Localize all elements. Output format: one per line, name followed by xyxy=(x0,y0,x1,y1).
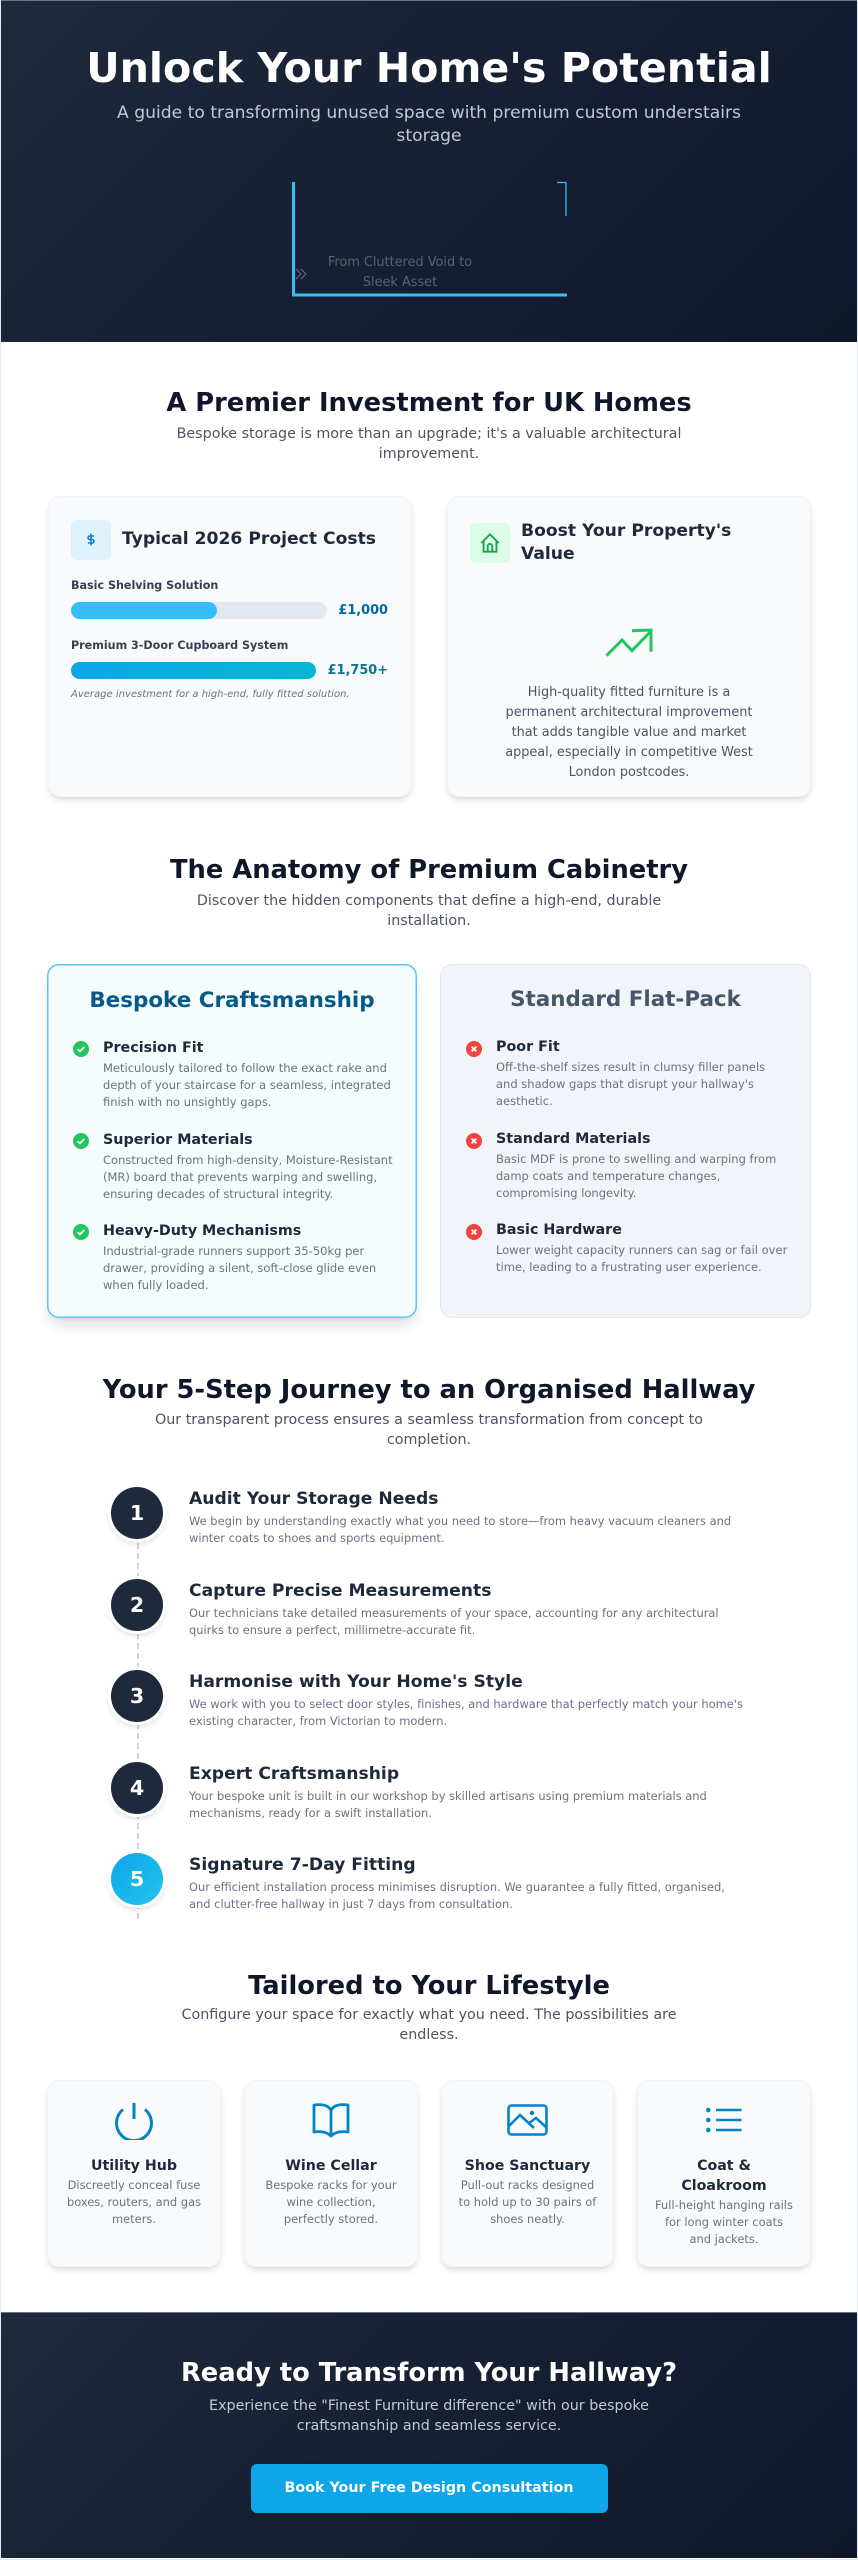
panel title: Bespoke Craftsmanship xyxy=(89,988,375,1013)
feature text: drawer, providing a silent, soft-close glide even xyxy=(103,1261,376,1275)
panel: coat and cloakroom xyxy=(637,2080,811,2267)
card text: Full-height hanging rails xyxy=(655,2198,793,2212)
step text: Our technicians take detailed measurements of your space, accounting for any architectural xyxy=(189,1606,719,1620)
drawback text: damp coats and temperature changes, xyxy=(496,1169,720,1183)
step text: and clutter-free hallway in just 7 days from consultation. xyxy=(189,1897,513,1911)
section heading: journey xyxy=(102,1375,755,1448)
step number xyxy=(111,1762,163,1814)
feature text xyxy=(103,1061,391,1109)
step text: We work with you to select door styles, finishes, and hardware that perfectly match your home's xyxy=(189,1697,743,1711)
feature text: ensuring decades of structural integrity. xyxy=(103,1187,333,1201)
drawback text: Lower weight capacity runners can sag or fail over xyxy=(496,1243,787,1257)
card text: Bespoke racks for your xyxy=(265,2178,397,2192)
value text: appeal, especially in competitive West xyxy=(505,745,753,760)
drawback: basic hardware xyxy=(466,1222,788,1274)
feature text: (MR) board that prevents warping and swelling, xyxy=(103,1170,377,1184)
card title: Coat & xyxy=(697,2158,751,2174)
icon: check xyxy=(73,1041,89,1057)
feature title: Precision Fit xyxy=(103,1040,204,1056)
panel: project costs xyxy=(48,496,412,797)
section heading: anatomy xyxy=(170,855,688,929)
feature text: finish with no unsightly gaps. xyxy=(103,1095,272,1109)
step number xyxy=(111,1670,163,1722)
card text: meters. xyxy=(112,2212,156,2226)
icon: dollar xyxy=(71,520,111,560)
feature title: Superior Materials xyxy=(103,1132,253,1148)
icon: trending up xyxy=(606,628,652,657)
step 5 xyxy=(0,1853,858,1913)
drawback text xyxy=(496,1060,765,1108)
title: Unlock Your Home's Potential xyxy=(86,44,772,92)
card title: Shoe Sanctuary xyxy=(465,2158,590,2174)
footer heading: Ready to Transform Your Hallway? xyxy=(181,2358,677,2388)
drawback text: and shadow gaps that disrupt your hallway's xyxy=(496,1077,754,1091)
heading: The Anatomy of Premium Cabinetry xyxy=(170,855,688,885)
step text xyxy=(189,1697,743,1728)
icon: check xyxy=(73,1224,89,1240)
drawback text: Basic MDF is prone to swelling and warping from xyxy=(496,1152,776,1166)
step number: 5 xyxy=(130,1867,144,1891)
icon: cross xyxy=(466,1133,482,1149)
icon: cross xyxy=(466,1041,482,1057)
drawback text: time, leading to a frustrating user experience. xyxy=(496,1260,762,1274)
icon: house xyxy=(470,523,510,563)
intro text xyxy=(177,426,681,462)
button: Book Your Free Design Consultation xyxy=(284,2480,574,2496)
intro text xyxy=(0,2005,858,2045)
bar label: Premium 3-Door Cupboard System xyxy=(71,639,288,652)
icon: open book xyxy=(312,2102,350,2138)
step number xyxy=(111,1487,163,1539)
panel title: Standard Flat-Pack xyxy=(510,987,741,1012)
panel: bespoke craftsmanship xyxy=(47,964,417,1318)
step 1 xyxy=(108,1487,731,1546)
panel: wine cellar xyxy=(244,2080,418,2267)
intro text xyxy=(155,1412,703,1448)
drawback text xyxy=(496,1152,776,1200)
value text: that adds tangible value and market xyxy=(512,725,746,740)
feature: superior materials xyxy=(73,1132,393,1201)
step title: Audit Your Storage Needs xyxy=(189,1489,439,1509)
button xyxy=(250,2464,608,2513)
step text: existing character, from Victorian to modern. xyxy=(189,1714,447,1728)
illustration caption xyxy=(328,255,472,290)
bar: basic shelving xyxy=(71,579,388,619)
bar value: £1,000 xyxy=(338,603,388,618)
drawback title: Standard Materials xyxy=(496,1131,651,1147)
value text: London postcodes. xyxy=(569,765,689,780)
intro text xyxy=(197,893,661,929)
intro text: installation. xyxy=(387,913,471,929)
drawback text: Off-the-shelf sizes result in clumsy filler panels xyxy=(496,1060,765,1074)
step text: mechanisms, ready for a swift installation. xyxy=(189,1806,432,1820)
step text: quirks to ensure a perfect, millimetre-accurate fit. xyxy=(189,1623,475,1637)
feature text: Constructed from high-density, Moisture-Resistant xyxy=(103,1153,393,1167)
step text xyxy=(189,1514,731,1545)
feature text: depth of your staircase for a seamless, integrated xyxy=(103,1078,391,1092)
step title: Capture Precise Measurements xyxy=(189,1581,491,1601)
card text: for long winter coats xyxy=(665,2215,783,2229)
intro text: Configure your space for exactly what you need. The possibilities are xyxy=(181,2007,677,2023)
step text: Your bespoke unit is built in our workshop by skilled artisans using premium materials and xyxy=(189,1789,707,1803)
icon: cross xyxy=(466,1224,482,1240)
card text: shoes neatly. xyxy=(490,2212,565,2226)
footer call to action xyxy=(1,2312,857,2558)
icon: picture xyxy=(507,2104,548,2136)
value text: permanent architectural improvement xyxy=(506,705,752,720)
icon: list xyxy=(705,2105,743,2135)
card text: to hold up to 30 pairs of xyxy=(459,2195,596,2209)
panel: standard flat-pack xyxy=(440,964,811,1318)
card text xyxy=(441,2177,614,2228)
step text xyxy=(189,1879,725,1913)
card title: Wine Cellar xyxy=(285,2158,377,2174)
feature: heavy-duty mechanisms xyxy=(73,1223,376,1292)
feature title: Heavy-Duty Mechanisms xyxy=(103,1223,301,1239)
drawback: standard materials xyxy=(466,1131,776,1200)
heading: Your 5-Step Journey to an Organised Hallway xyxy=(103,1375,755,1405)
step number: 3 xyxy=(130,1684,144,1708)
value text: High-quality fitted furniture is a xyxy=(528,685,730,700)
subtitle: A guide to transforming unused space with premium custom understairs xyxy=(117,103,741,123)
feature text: Industrial-grade runners support 35-50kg per xyxy=(103,1244,364,1258)
card text xyxy=(637,2197,811,2248)
footnote: Average investment for a high-end, fully fitted solution. xyxy=(71,689,350,700)
step number: 1 xyxy=(130,1501,144,1525)
card title: Cloakroom xyxy=(681,2178,767,2194)
illustration: understairs outline xyxy=(292,182,567,296)
step title: Harmonise with Your Home's Style xyxy=(189,1672,523,1692)
feature text xyxy=(103,1244,376,1292)
panel: utility hub xyxy=(47,2080,221,2267)
card text xyxy=(244,2177,418,2228)
bar: premium system xyxy=(71,639,388,679)
step title: Expert Craftsmanship xyxy=(189,1764,399,1784)
subtitle: storage xyxy=(396,126,462,146)
card title: Typical 2026 Project Costs xyxy=(122,529,376,549)
step number xyxy=(111,1579,163,1631)
heading: Tailored to Your Lifestyle xyxy=(248,1971,610,2001)
icon: check xyxy=(73,1133,89,1149)
step text xyxy=(189,1606,719,1637)
card title xyxy=(521,521,731,564)
intro text: improvement. xyxy=(379,446,479,462)
footer text: craftsmanship and seamless service. xyxy=(297,2418,561,2434)
drawback title: Basic Hardware xyxy=(496,1222,622,1238)
card text xyxy=(47,2177,221,2228)
value text xyxy=(505,685,753,780)
step 2 xyxy=(108,1576,719,1638)
step number: 2 xyxy=(130,1593,144,1617)
step text: We begin by understanding exactly what you need to store—from heavy vacuum cleaners and xyxy=(189,1514,731,1528)
drawback text: compromising longevity. xyxy=(496,1186,636,1200)
feature text xyxy=(103,1153,393,1201)
section heading: lifestyle xyxy=(0,1971,858,2047)
subtitle xyxy=(117,103,741,146)
intro text: Our transparent process ensures a seamless transformation from concept to xyxy=(155,1412,703,1428)
panel: shoe sanctuary xyxy=(441,2080,614,2267)
step text: Our efficient installation process minimises disruption. We guarantee a fully fitted, organised, xyxy=(189,1880,725,1894)
card text: boxes, routers, and gas xyxy=(67,2195,201,2209)
icon: power xyxy=(113,2102,155,2140)
intro text: completion. xyxy=(387,1432,471,1448)
drawback title: Poor Fit xyxy=(496,1039,560,1055)
footer text: Experience the "Finest Furniture difference" with our bespoke xyxy=(209,2398,649,2414)
step text: winter coats to shoes and sports equipment. xyxy=(189,1531,445,1545)
bar label: Basic Shelving Solution xyxy=(71,579,218,592)
section heading: investment xyxy=(166,388,692,462)
feature text: Meticulously tailored to follow the exact rake and xyxy=(103,1061,387,1075)
hero banner xyxy=(1,0,857,342)
footer text xyxy=(0,2396,858,2436)
illustration caption: From Cluttered Void to xyxy=(328,255,472,270)
bar fill xyxy=(71,662,316,679)
feature text: when fully loaded. xyxy=(103,1278,209,1292)
heading: A Premier Investment for UK Homes xyxy=(166,388,692,418)
card title xyxy=(637,2156,811,2196)
card text: perfectly stored. xyxy=(284,2212,378,2226)
bar value: £1,750+ xyxy=(328,663,388,678)
feature: precision fit xyxy=(73,1040,391,1109)
card title: Utility Hub xyxy=(91,2158,177,2174)
card text: Pull-out racks designed xyxy=(461,2178,594,2192)
panel: property value xyxy=(447,496,811,797)
card text: and jackets. xyxy=(690,2232,758,2246)
drawback text xyxy=(496,1243,788,1274)
card title: Value xyxy=(521,544,575,564)
card text: wine collection, xyxy=(287,2195,375,2209)
card text: Discreetly conceal fuse xyxy=(68,2178,200,2192)
bar track xyxy=(71,602,327,619)
drawback text: aesthetic. xyxy=(496,1094,553,1108)
timeline connector xyxy=(137,1513,139,1919)
step number: 4 xyxy=(130,1776,144,1800)
intro text: endless. xyxy=(399,2027,459,2043)
step 4 xyxy=(108,1762,707,1820)
step number xyxy=(111,1853,163,1905)
intro text: Discover the hidden components that define a high-end, durable xyxy=(197,893,661,909)
drawback: poor fit xyxy=(466,1039,765,1108)
step text xyxy=(189,1789,707,1820)
illustration caption: Sleek Asset xyxy=(363,275,437,290)
step 3 xyxy=(108,1667,743,1728)
card title: Boost Your Property's xyxy=(521,521,731,541)
step title: Signature 7-Day Fitting xyxy=(189,1855,416,1875)
intro text: Bespoke storage is more than an upgrade; it's a valuable architectural xyxy=(177,426,681,442)
